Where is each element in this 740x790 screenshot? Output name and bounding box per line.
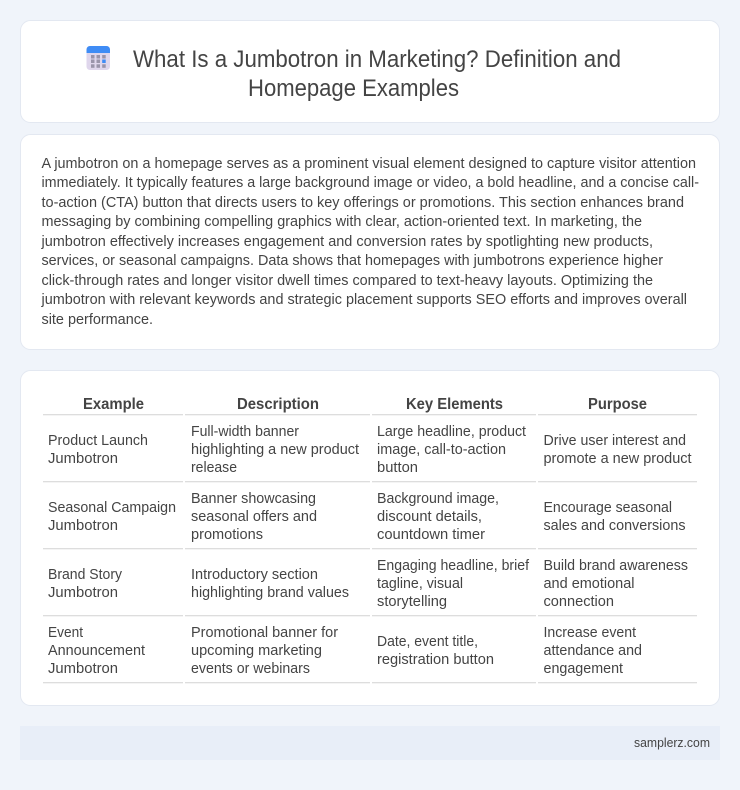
table row: product launch: Jumbotron <box>48 451 118 467</box>
icon: calendar <box>86 46 110 70</box>
table row: seasonal campaign: Jumbotron <box>48 518 118 534</box>
text block: definition: messaging by combining compelling graphics with clear, action-oriented text. In marketing, the <box>42 214 642 230</box>
table row: brand story: highlighting brand values <box>191 585 349 601</box>
table row: seasonal campaign: Banner showcasing <box>191 491 316 507</box>
table row: brand story <box>48 558 688 610</box>
table row: seasonal campaign: sales and conversions <box>544 518 686 534</box>
panel: title card <box>20 20 720 122</box>
table header row: Description <box>237 396 319 413</box>
table row: seasonal campaign: seasonal offers and <box>191 509 317 525</box>
table row: event announcement: engagement <box>544 661 623 677</box>
title: Homepage Examples <box>248 75 459 102</box>
text block: definition: A jumbotron on a homepage serves as a prominent visual element designed to capture visitor attention <box>42 156 696 172</box>
table row: brand story: connection <box>544 594 614 610</box>
table row: brand story: Engaging headline, brief <box>377 558 530 574</box>
table row: brand story: and emotional <box>544 576 634 592</box>
table row: brand story: Introductory section <box>191 567 318 583</box>
table row: product launch: button <box>377 460 418 476</box>
table row: brand story: storytelling <box>377 594 447 610</box>
table row: event announcement: Promotional banner for <box>191 625 338 641</box>
text block: definition: jumbotron effectively increases engagement and conversion rates by spotlighting new products, <box>41 234 653 250</box>
table row: product launch: Full-width banner <box>191 424 299 440</box>
table row: product launch: Product Launch <box>48 433 148 449</box>
table row: brand story: tagline, visual <box>377 576 463 592</box>
text block: definition: site performance. <box>42 312 153 328</box>
title: What Is a Jumbotron in Marketing? Definition and <box>133 46 621 73</box>
table header row: Key Elements <box>406 396 503 413</box>
footer bar: samplerz.com <box>634 736 710 750</box>
table row: event announcement: Event <box>48 625 83 641</box>
table row: product launch: Large headline, product <box>377 424 526 440</box>
table row: product launch <box>48 424 692 476</box>
table row: seasonal campaign: Seasonal Campaign <box>48 500 176 516</box>
table row: seasonal campaign: promotions <box>191 527 263 543</box>
table row: seasonal campaign: Encourage seasonal <box>544 500 672 516</box>
table row: event announcement: Announcement <box>48 643 145 659</box>
table row: event announcement: attendance and <box>544 643 642 659</box>
table row: brand story: Jumbotron <box>48 585 118 601</box>
table row: seasonal campaign <box>48 491 686 543</box>
table row: brand story: Build brand awareness <box>544 558 688 574</box>
table row: product launch: promote a new product <box>544 451 692 467</box>
text block: definition: immediately. It typically features a large background image or video, a bold headline, and a concise call- <box>42 175 699 191</box>
table row: product launch: release <box>191 460 237 476</box>
table row: event announcement <box>48 625 642 677</box>
table row: event announcement: Increase event <box>544 625 636 641</box>
table row: seasonal campaign: Background image, <box>377 491 499 507</box>
table row: event announcement: Jumbotron <box>48 661 118 677</box>
table row: event announcement: registration button <box>377 652 494 668</box>
table row: brand story: Brand Story <box>48 567 123 583</box>
text block: definition: click-through rates and longer visitor dwell times compared to text-heavy layouts. Optimizing the <box>42 273 653 289</box>
text block: definition: services, or seasonal campaigns. Data shows that homepages with jumbotrons experience higher <box>42 253 663 269</box>
text block: definition <box>41 156 699 328</box>
table row: event announcement: Date, event title, <box>377 634 478 650</box>
title <box>133 46 621 102</box>
table row: seasonal campaign: countdown timer <box>377 527 485 543</box>
table header row: Example <box>83 396 144 413</box>
footer bar <box>20 726 720 760</box>
text block: definition: to-action (CTA) button that directs users to key offerings or promotions. This section enhances brand <box>42 195 684 211</box>
table row: product launch: image, call-to-action <box>377 442 506 458</box>
table row: product launch: Drive user interest and <box>544 433 686 449</box>
table row: event announcement: upcoming marketing <box>191 643 322 659</box>
table row: event announcement: events or webinars <box>191 661 310 677</box>
text block: definition: jumbotron with relevant keywords and strategic placement supports SEO efforts and improves overall <box>41 292 687 308</box>
panel: definition paragraph <box>20 134 720 350</box>
table row: product launch: highlighting a new product <box>191 442 359 458</box>
table header row <box>83 396 647 413</box>
table row: seasonal campaign: discount details, <box>377 509 482 525</box>
panel: examples table <box>20 370 720 706</box>
table header row: Purpose <box>588 396 647 413</box>
